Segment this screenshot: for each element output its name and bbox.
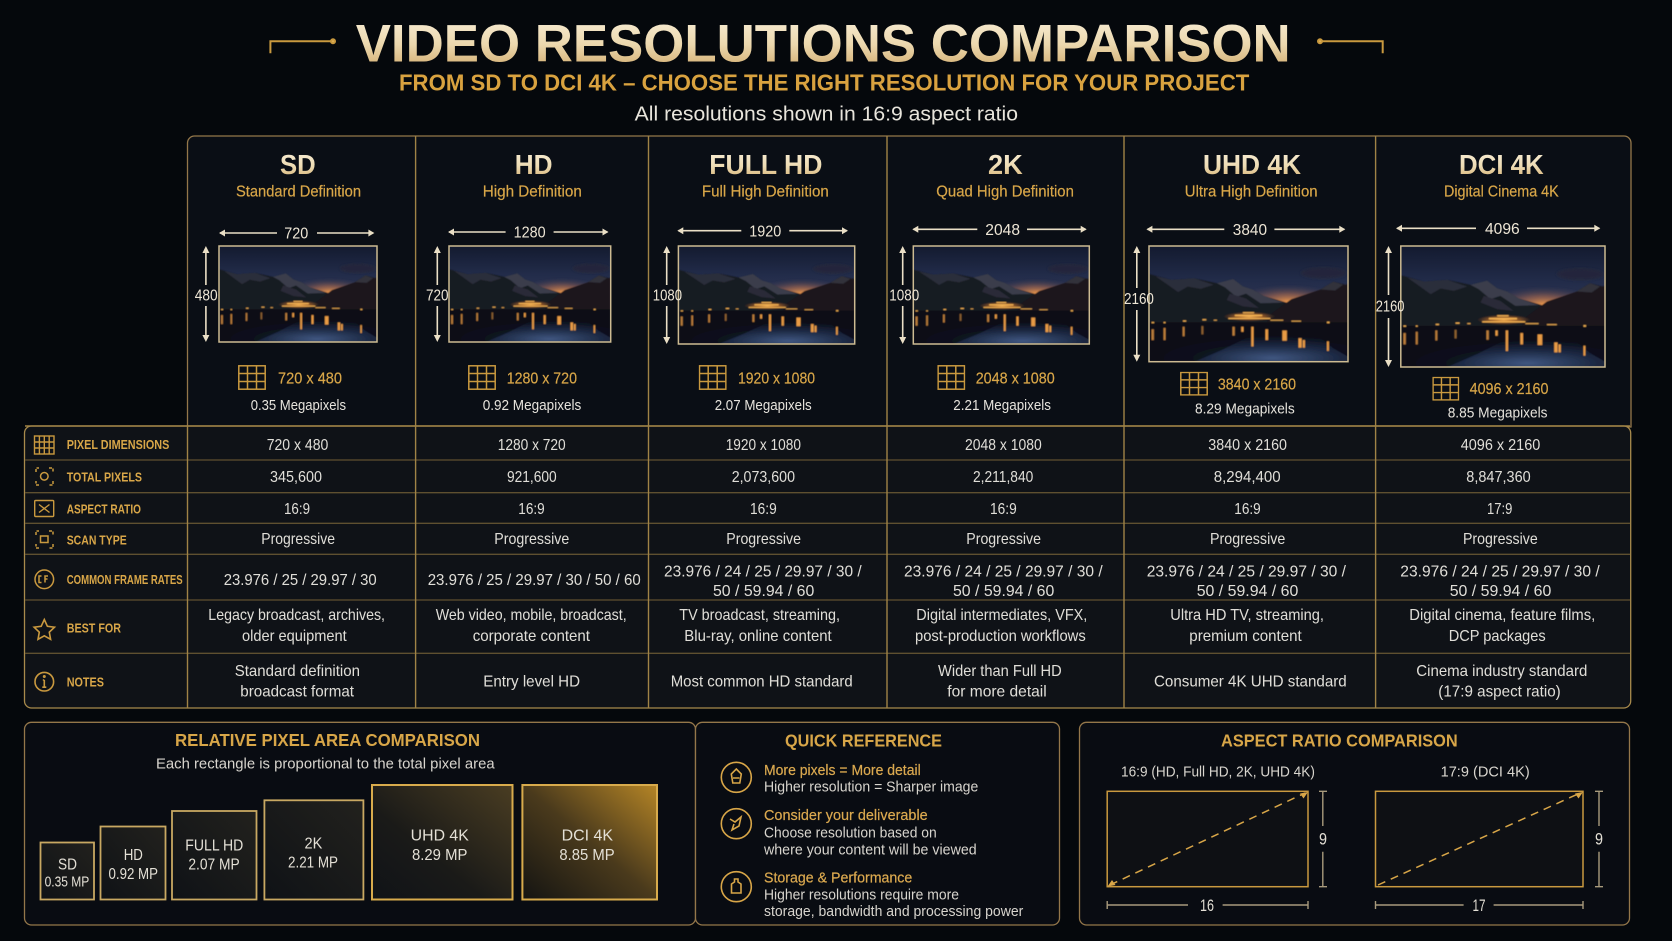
preview image <box>449 246 611 342</box>
tip: storage: storage, bandwidth and processing power <box>764 903 1023 920</box>
column: DCI 4K header: 4096 x 2160 <box>1470 381 1549 398</box>
tip: deliverable: Choose resolution based on <box>764 824 937 841</box>
tip: more pixels: Higher resolution = Sharper image <box>764 779 978 796</box>
row: common frame rates: 50 / 59.94 / 60 <box>1197 583 1298 600</box>
column: DCI 4K header: Digital Cinema 4K <box>1444 184 1559 201</box>
icon: grid <box>1181 372 1207 395</box>
row: notes: Cinema industry standard <box>1416 663 1587 680</box>
icon: target frame <box>36 468 53 485</box>
height arrow: 480 <box>195 246 218 342</box>
column: HD header: HD <box>515 149 552 180</box>
preview image <box>1401 246 1605 367</box>
diagram: 17:9: 17:9 (DCI 4K) <box>1441 764 1530 781</box>
row: aspect ratio: 16:9 <box>990 501 1017 518</box>
row: common frame rates: 23.976 / 25 / 29.97 / 30 <box>224 572 377 589</box>
area: DCI 4K <box>522 785 657 900</box>
row: pixel dimensions: 1920 x 1080 <box>726 437 801 454</box>
height arrow: 720 <box>426 246 449 342</box>
row: total pixels: TOTAL PIXELS <box>67 470 142 484</box>
row: best for <box>34 607 1595 645</box>
row: aspect ratio: 16:9 <box>1234 501 1261 518</box>
row: common frame rates: 50 / 59.94 / 60 <box>953 583 1054 600</box>
column: DCI 4K header <box>1376 149 1605 421</box>
tip: storage <box>721 869 1023 920</box>
row: notes <box>35 663 1587 701</box>
column: HD header: High Definition <box>483 184 582 201</box>
row: best for: Legacy broadcast, archives, <box>208 607 385 624</box>
height arrow: 480: 480 <box>195 288 218 304</box>
row: scan type: Progressive <box>966 531 1041 548</box>
row: pixel dimensions: 2048 x 1080 <box>965 437 1042 454</box>
diagram: 16:9: 16:9 (HD, Full HD, 2K, UHD 4K) <box>1121 764 1315 781</box>
width arrow: 3840: 3840 <box>1233 222 1267 239</box>
row: aspect ratio: 16:9 <box>284 501 310 518</box>
width arrow: 4096: 4096 <box>1485 221 1520 238</box>
icon: grid <box>469 366 495 389</box>
row: aspect ratio <box>35 500 1512 518</box>
height arrow: 2160 <box>1124 246 1154 362</box>
row: best for: BEST FOR <box>67 620 121 636</box>
row: common frame rates: 23.976 / 25 / 29.97 / 30 / 50 / 60 <box>428 572 641 589</box>
height arrow: 1080: 1080 <box>653 288 682 304</box>
area: 2K <box>264 800 363 900</box>
row: common frame rates <box>35 564 1600 600</box>
row: common frame rates: 23.976 / 24 / 25 / 29.97 / 30 / <box>1400 564 1600 581</box>
column: HD header: 0.92 Megapixels <box>483 397 581 414</box>
row: total pixels: 8,294,400 <box>1214 469 1281 486</box>
row: common frame rates: 50 / 59.94 / 60 <box>713 583 814 600</box>
column: HD header: 1280 x 720 <box>507 370 577 387</box>
height arrow: 2160: 2160 <box>1124 291 1154 308</box>
area: HD <box>100 826 166 900</box>
diagram: 16:9: 16 <box>1200 897 1214 915</box>
icon: scan frame <box>36 531 53 548</box>
tip: storage: Storage & Performance <box>764 869 912 886</box>
diagram: 16:9: 9 <box>1319 830 1327 848</box>
column: 2K header: 2K <box>988 149 1023 180</box>
column: 2K header: 2048 x 1080 <box>976 370 1055 387</box>
row: pixel dimensions: PIXEL DIMENSIONS <box>67 437 170 452</box>
icon: pixel grid <box>34 436 54 454</box>
column: SD header: SD <box>280 149 316 180</box>
row: best for: Blu-ray, online content <box>684 628 832 645</box>
area: DCI 4K: DCI 4K <box>562 828 614 845</box>
row: notes: Entry level HD <box>483 674 580 691</box>
row: notes: NOTES <box>67 674 104 690</box>
column: Full HD header <box>653 149 855 414</box>
icon: grid <box>938 366 964 389</box>
subtitle: FROM SD TO DCI 4K – CHOOSE THE RIGHT RESOLUTION FOR YOUR PROJECT <box>399 69 1249 95</box>
row: best for: corporate content <box>473 628 591 645</box>
panel: relative pixel area comparison: Each rectangle is proportional to the total pixel area <box>156 755 495 772</box>
row: scan type: Progressive <box>494 531 569 548</box>
preview image <box>678 246 855 344</box>
row: notes: broadcast format <box>240 684 355 701</box>
row: total pixels: 2,211,840 <box>973 469 1033 486</box>
area: HD: HD <box>124 847 143 864</box>
row: aspect ratio: 17:9 <box>1487 501 1512 518</box>
row: aspect ratio: 16:9 <box>518 501 545 518</box>
row: common frame rates: COMMON FRAME RATES <box>67 572 183 587</box>
area: UHD 4K: UHD 4K <box>411 828 469 845</box>
panel: quick reference <box>696 722 1060 925</box>
icon: grid <box>700 366 726 389</box>
note: aspect ratio: All resolutions shown in 16:9 aspect ratio <box>635 103 1018 126</box>
column: 2K header <box>889 149 1089 414</box>
row: best for: Digital cinema, feature films, <box>1409 607 1595 624</box>
row: common frame rates: 50 / 59.94 / 60 <box>1450 583 1551 600</box>
panel: relative pixel area comparison: RELATIVE PIXEL AREA COMPARISON <box>175 730 480 750</box>
row: best for: Ultra HD TV, streaming, <box>1170 607 1324 624</box>
column: UHD 4K header: 3840 x 2160 <box>1218 376 1296 393</box>
row: aspect ratio: ASPECT RATIO <box>67 502 141 516</box>
column: 2K header: Quad High Definition <box>936 184 1074 201</box>
panel: column headers frame <box>188 136 1631 427</box>
preview image <box>219 246 377 342</box>
row: notes: Wider than Full HD <box>938 663 1062 680</box>
width arrow: 4096 <box>1396 221 1600 238</box>
row: scan type: Progressive <box>261 531 335 548</box>
area: SD: 0.35 MP <box>45 875 89 891</box>
ornament: left title bracket <box>270 39 335 53</box>
width arrow: 1920 <box>677 223 848 240</box>
preview image <box>913 246 1089 344</box>
column: Full HD header: 1920 x 1080 <box>738 370 815 387</box>
row: best for: premium content <box>1189 628 1302 645</box>
width arrow: 720 <box>219 226 374 243</box>
area: DCI 4K: 8.85 MP <box>559 847 615 864</box>
row: notes: Consumer 4K UHD standard <box>1154 674 1347 691</box>
row: total pixels: 8,847,360 <box>1466 469 1531 486</box>
column: UHD 4K header: 8.29 Megapixels <box>1195 400 1295 417</box>
area: Full HD: 2.07 MP <box>188 856 240 873</box>
row: notes: for more detail <box>947 684 1047 701</box>
tip: deliverable: Consider your deliverable <box>764 807 928 824</box>
row: notes: Most common HD standard <box>671 674 853 691</box>
column: SD header: 720 x 480 <box>278 370 342 387</box>
panel: comparison table frame <box>24 426 1631 708</box>
width arrow: 2048 <box>912 222 1087 239</box>
row: common frame rates: 23.976 / 24 / 25 / 29.97 / 30 / <box>664 564 862 581</box>
row: scan type: Progressive <box>1463 531 1538 548</box>
icon: grid <box>1433 377 1459 400</box>
area: 2K: 2K <box>304 835 323 852</box>
height arrow: 2160: 2160 <box>1376 298 1405 316</box>
column: DCI 4K header: DCI 4K <box>1459 149 1544 180</box>
area: UHD 4K <box>372 785 512 900</box>
panel: quick reference: QUICK REFERENCE <box>785 731 942 751</box>
row: pixel dimensions <box>34 436 1540 454</box>
height arrow: 720: 720 <box>426 288 449 304</box>
tip: more pixels: More pixels = More detail <box>764 762 921 779</box>
area: HD: 0.92 MP <box>108 866 158 883</box>
column: Full HD header: FULL HD <box>709 149 822 180</box>
row: best for: Web video, mobile, broadcast, <box>436 607 627 624</box>
tip: deliverable <box>721 807 977 859</box>
width arrow: 2048: 2048 <box>985 222 1020 239</box>
diagram: 17:9: 9 <box>1595 830 1603 848</box>
row: scan type: Progressive <box>726 531 801 548</box>
row: pixel dimensions: 3840 x 2160 <box>1208 437 1287 454</box>
width arrow: 1280: 1280 <box>514 225 546 242</box>
column: Full HD header: 2.07 Megapixels <box>715 397 812 414</box>
row: total pixels: 921,600 <box>507 469 557 486</box>
icon: grid <box>239 366 265 389</box>
diagram: 17:9 <box>1376 764 1603 915</box>
column: UHD 4K header <box>1124 149 1348 417</box>
column: SD header <box>195 149 377 414</box>
icon: aspect frame <box>35 500 54 516</box>
area: 2K: 2.21 MP <box>288 854 338 871</box>
row: common frame rates: 23.976 / 24 / 25 / 29.97 / 30 / <box>904 564 1103 581</box>
height arrow: 2160 <box>1376 246 1405 367</box>
icon: frame rate dial <box>35 570 54 589</box>
row: pixel dimensions: 720 x 480 <box>267 437 328 454</box>
row: best for: Digital intermediates, VFX, <box>916 607 1087 624</box>
row: best for: DCP packages <box>1449 628 1546 645</box>
grid lines <box>25 460 1630 653</box>
row: best for: post-production workflows <box>915 628 1086 645</box>
icon: star <box>34 620 54 639</box>
column: UHD 4K header: UHD 4K <box>1203 149 1301 180</box>
row: common frame rates: 23.976 / 24 / 25 / 29.97 / 30 / <box>1147 564 1347 581</box>
area: SD <box>40 842 94 900</box>
row: best for: TV broadcast, streaming, <box>679 607 840 624</box>
width arrow: 1280 <box>448 225 608 242</box>
row: total pixels: 345,600 <box>270 469 322 486</box>
preview image <box>1149 246 1348 362</box>
area: Full HD <box>172 811 256 900</box>
width arrow: 3840 <box>1146 222 1345 239</box>
column: UHD 4K header: Ultra High Definition <box>1185 184 1318 201</box>
row: notes: (17:9 aspect ratio) <box>1438 684 1561 701</box>
panel: aspect ratio comparison <box>1080 722 1630 925</box>
row: scan type: Progressive <box>1210 531 1285 548</box>
column: HD header <box>426 149 611 414</box>
row: notes: Standard definition <box>235 663 360 680</box>
height arrow: 1080 <box>889 246 919 344</box>
area: UHD 4K: 8.29 MP <box>412 847 467 864</box>
row: aspect ratio: 16:9 <box>750 501 777 518</box>
icon: info <box>35 672 54 691</box>
column: SD header: 0.35 Megapixels <box>251 397 346 414</box>
panel: relative pixel area comparison <box>24 722 696 925</box>
row: pixel dimensions: 4096 x 2160 <box>1461 437 1540 454</box>
column: DCI 4K header: 8.85 Megapixels <box>1448 404 1548 421</box>
row: total pixels <box>36 468 1531 486</box>
tip: more pixels <box>721 762 978 796</box>
ornament: right title bracket <box>1318 39 1383 53</box>
height arrow: 1080: 1080 <box>889 288 919 304</box>
row: scan type <box>36 531 1538 548</box>
column: SD header: Standard Definition <box>236 184 361 201</box>
area: SD: SD <box>58 856 77 873</box>
diagram: 16:9 <box>1107 764 1327 915</box>
row: best for: older equipment <box>242 628 347 645</box>
diagram: 17:9: 17 <box>1472 897 1486 915</box>
width arrow: 720: 720 <box>284 226 308 243</box>
width arrow: 1920: 1920 <box>749 223 781 240</box>
row: scan type: SCAN TYPE <box>67 532 127 548</box>
height arrow: 1080 <box>653 246 682 344</box>
panel: aspect ratio comparison: ASPECT RATIO COMPARISON <box>1221 731 1458 751</box>
row: total pixels: 2,073,600 <box>732 469 795 486</box>
row: pixel dimensions: 1280 x 720 <box>498 437 566 454</box>
title: VIDEO RESOLUTIONS COMPARISON <box>356 15 1291 74</box>
area: Full HD: FULL HD <box>185 838 243 855</box>
column: 2K header: 2.21 Megapixels <box>953 397 1051 414</box>
tip: storage: Higher resolutions require more <box>764 886 959 903</box>
column: Full HD header: Full High Definition <box>702 184 829 201</box>
tip: deliverable: where your content will be viewed <box>763 842 977 859</box>
